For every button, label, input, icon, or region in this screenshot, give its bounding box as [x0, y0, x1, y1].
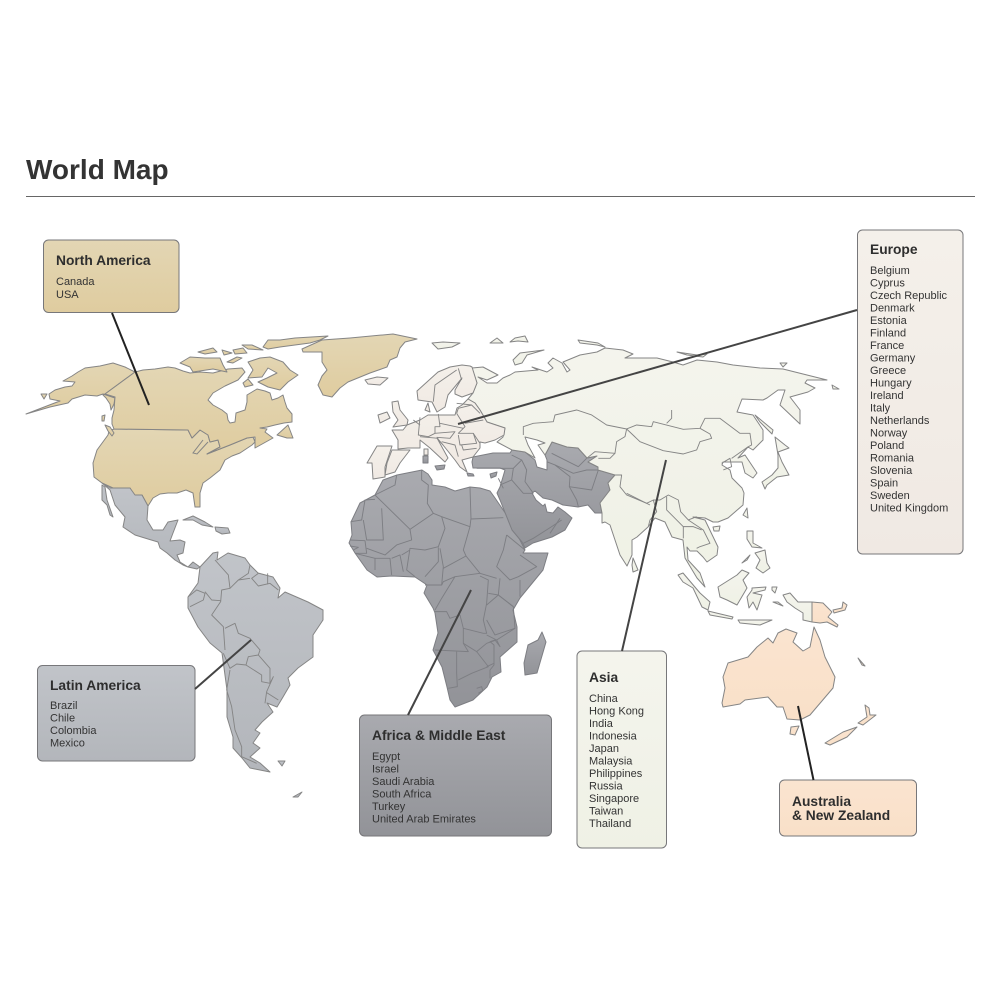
arrow: North America leader [112, 313, 149, 405]
panel: Europe: Europe [870, 242, 918, 257]
panel: Europe: Netherlands [870, 415, 930, 427]
United Kingdom [392, 401, 408, 427]
Mexico and Central America [102, 483, 200, 569]
Borneo [718, 570, 749, 605]
Middle East borders [477, 453, 598, 543]
panel: Asia: Taiwan [589, 806, 623, 818]
panel: Africa and Middle East: Israel [372, 764, 399, 776]
panel: Asia: India [589, 718, 614, 730]
panel: Latin America: Mexico [50, 738, 85, 750]
panel: Asia: Malaysia [589, 756, 633, 768]
panel: Asia [577, 651, 666, 848]
panel: Asia: Philippines [589, 768, 643, 780]
panel: North America: North America [56, 253, 151, 268]
Australia [722, 627, 835, 720]
Denmark [425, 403, 430, 412]
panel: Asia: China [589, 693, 619, 705]
Hainan [713, 526, 720, 531]
panel: Europe: United Kingdom [870, 502, 948, 514]
panel: Europe: Estonia [870, 315, 908, 327]
Africa borders [350, 470, 537, 693]
Java [708, 611, 733, 619]
panel: Africa and Middle East: Egypt [372, 751, 400, 763]
European mainland [392, 399, 505, 472]
panel: North America: USA [56, 289, 79, 301]
panel: Africa and Middle East: Turkey [372, 801, 406, 813]
map: Africa and Middle East [349, 442, 615, 707]
panel: Asia: Singapore [589, 793, 639, 805]
Philippines [747, 531, 762, 548]
Victoria Island [180, 357, 227, 372]
panel: Africa and Middle East: Saudi Arabia [372, 776, 435, 788]
Sumatra [678, 573, 710, 610]
Europe borders [413, 368, 483, 457]
South America [188, 552, 323, 772]
panel: Australia and New Zealand: Australia [792, 794, 851, 809]
panel: Europe: Cyprus [870, 278, 905, 290]
Middle East [472, 442, 615, 548]
contiguous USA [93, 429, 255, 507]
panel: Europe: Italy [870, 402, 891, 414]
Vancouver Island [105, 425, 114, 436]
Greenland [302, 334, 417, 397]
Tasmania [790, 726, 799, 735]
Ireland [378, 412, 390, 423]
panel: Europe: Norway [870, 428, 908, 440]
panel: Europe: Belgium [870, 265, 910, 277]
title: World Map [26, 154, 169, 185]
Madagascar [524, 632, 546, 675]
Lesser Sunda islands [738, 620, 772, 625]
panel: Latin America: Chile [50, 712, 75, 724]
panel: Australia and New Zealand [780, 780, 916, 836]
arrow: Latin America leader [195, 640, 251, 689]
panel: Europe: Germany [870, 352, 916, 364]
arrow: Asia leader [622, 460, 666, 651]
New Caledonia [858, 658, 865, 666]
Japan [762, 437, 789, 489]
Mediterranean islands [423, 456, 428, 463]
Ellesmere Island [263, 336, 328, 349]
panel: Asia: Japan [589, 743, 619, 755]
map: Latin America [102, 483, 323, 797]
panel: North America: Canada [56, 276, 95, 288]
panel: Asia: Russia [589, 780, 624, 792]
Eurasia mainland [468, 348, 827, 587]
panel: North America [44, 240, 179, 312]
panel: Europe: France [870, 340, 904, 352]
Western New Guinea [783, 593, 812, 622]
panel: Africa and Middle East: South Africa [372, 788, 432, 800]
Corsica [424, 449, 428, 455]
Sulawesi [747, 587, 766, 610]
arrow: Australia leader [798, 706, 814, 780]
panel: Europe [858, 230, 963, 554]
panel: Africa and Middle East [360, 715, 552, 836]
panel: Asia: Hong Kong [589, 706, 644, 718]
panel: Europe: Poland [870, 440, 904, 452]
map: Asia [432, 336, 839, 625]
map: North America [26, 334, 417, 507]
map: Europe [365, 365, 505, 479]
map: Australia and New Zealand [722, 602, 876, 745]
Great Lakes [193, 440, 208, 454]
panel: Europe: Romania [870, 452, 915, 464]
panel: Europe: Finland [870, 328, 906, 340]
Africa [349, 470, 548, 707]
New Zealand [858, 705, 876, 725]
Banks and Arctic islands [198, 348, 217, 354]
panel: Europe: Sweden [870, 490, 910, 502]
Scandinavia [417, 365, 477, 412]
panel: Latin America: Colombia [50, 725, 97, 737]
panel: Latin America [38, 666, 195, 761]
South America borders [188, 560, 278, 763]
Arctic islands [432, 342, 460, 349]
Baja California [102, 485, 113, 517]
panel: Europe: Czech Republic [870, 290, 948, 302]
Portugal [367, 446, 392, 479]
Asia borders [523, 410, 752, 548]
arrow: Europe leader [458, 310, 857, 424]
panel: Europe: Hungary [870, 378, 912, 390]
panel: Europe: Spain [870, 478, 898, 490]
panel: Europe: Slovenia [870, 465, 913, 477]
Sakhalin [755, 415, 773, 434]
panel: Europe: Denmark [870, 302, 915, 314]
panel: Africa and Middle East: Africa & Middle East [372, 728, 506, 743]
panel: Europe: Ireland [870, 390, 904, 402]
Sri Lanka [632, 558, 638, 572]
panel: Asia: Asia [589, 670, 618, 685]
panel: Asia: Indonesia [589, 730, 638, 742]
Canada [105, 367, 292, 454]
panel: Europe: Greece [870, 365, 906, 377]
panel: Africa and Middle East: United Arab Emirates [372, 814, 476, 826]
Taiwan [743, 508, 748, 518]
Cuba [183, 516, 213, 527]
arrow: Africa leader [408, 590, 471, 715]
Hispaniola [215, 527, 230, 534]
panel: Latin America: Latin America [50, 678, 141, 693]
panel: Asia: Thailand [589, 818, 631, 830]
Baffin Island [248, 357, 298, 390]
Spain [385, 450, 410, 475]
Newfoundland [277, 425, 293, 438]
Iceland [365, 377, 388, 385]
Papua New Guinea [812, 602, 838, 627]
Alaska [26, 363, 135, 414]
panel: Australia and New Zealand: & New Zealand [792, 808, 890, 823]
panel: Latin America: Brazil [50, 700, 78, 712]
